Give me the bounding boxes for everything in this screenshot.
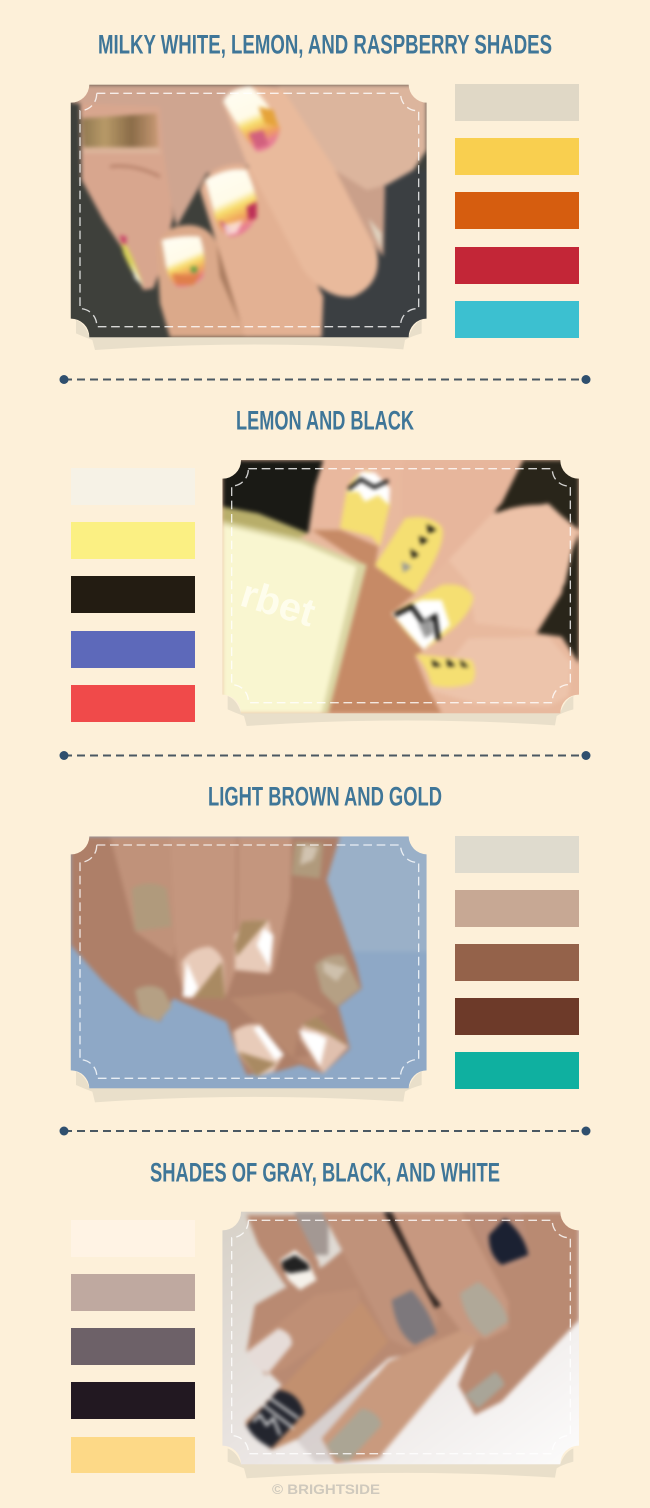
photo: lemon and black nails with bottle xyxy=(222,460,579,726)
colour swatches: lemon and black xyxy=(71,468,195,722)
heading: light brown and gold: LIGHT BROWN AND GOLD xyxy=(208,782,442,812)
panel: gray, black and white xyxy=(71,1158,598,1488)
colour swatches: gray, black and white xyxy=(71,1220,195,1473)
colour swatches: milky white xyxy=(455,84,579,338)
panel: milky white, lemon and raspberry xyxy=(60,30,579,353)
heading: gray, black and white: SHADES OF GRAY, BLACK, AND WHITE xyxy=(150,1158,500,1188)
divider 2 xyxy=(60,751,590,760)
divider 1 xyxy=(60,375,590,384)
divider 3 xyxy=(60,1126,590,1136)
colour swatches: light brown and gold xyxy=(455,836,579,1089)
heading: lemon and black: LEMON AND BLACK xyxy=(236,406,414,436)
panel: light brown and gold xyxy=(60,782,579,1108)
bottle lettering: rbet xyxy=(236,572,320,636)
watermark: brightside: © BRIGHTSIDE xyxy=(272,1481,380,1497)
photo: brown and gold glitter nails xyxy=(70,836,427,1102)
photo: milky white floral nails xyxy=(70,84,427,350)
panel: lemon and black xyxy=(71,406,598,733)
photo: gray, black and white nails xyxy=(222,1212,579,1478)
